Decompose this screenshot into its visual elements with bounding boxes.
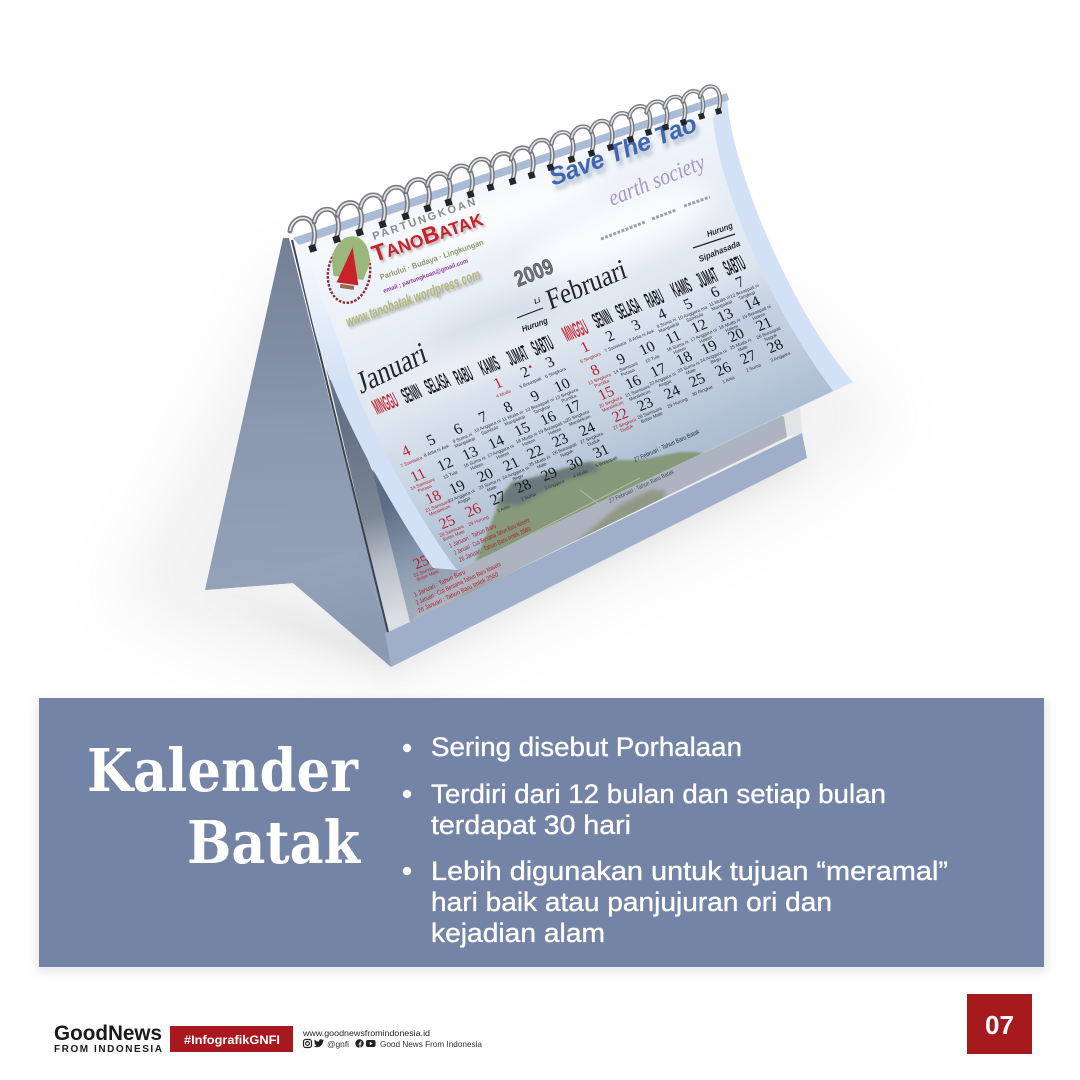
february weekday header xyxy=(559,251,750,347)
february day grid: 13 xyxy=(714,305,736,326)
february day grid: 9 Suma ni xyxy=(656,317,677,329)
january day grid: Bego xyxy=(512,473,524,482)
save the tao shadow: Save The Tao xyxy=(548,115,704,197)
january weekday header: SABTU xyxy=(528,331,558,361)
bullet list: Terdiri dari 12 bulan dan setiap bulan xyxy=(431,779,886,809)
february day grid: 26 Boraspati xyxy=(755,326,782,340)
february weekday header: RABU xyxy=(641,285,668,313)
january day grid: 25 xyxy=(436,512,458,533)
february day grid: 17 Anggara ni xyxy=(689,327,718,343)
february holiday note: 27 Februari : Tahun Baru Batak xyxy=(633,428,701,464)
january day grid: 18 Muda ni xyxy=(515,431,538,444)
january day grid: Holom xyxy=(521,438,536,447)
january day grid: 1 xyxy=(491,374,506,392)
february day grid: 30 Ringkar xyxy=(691,384,714,397)
january day grid: 7 xyxy=(476,408,491,426)
february day grid: Holom xyxy=(672,346,687,355)
february day grid: 25 Muda ni xyxy=(729,337,752,350)
january day grid xyxy=(392,351,618,542)
january day grid: 31 xyxy=(590,441,612,462)
january day grid: 10 xyxy=(551,375,573,396)
page number badge xyxy=(967,994,1032,1054)
january holiday notes: 2 Januari : Cuti Bersama Tahun Baru Masehi xyxy=(453,517,531,557)
hashtag badge: #InfografikGNFI xyxy=(184,1033,280,1047)
january day grid: 26 Boraspati xyxy=(551,442,578,456)
stand floor fold xyxy=(205,550,391,667)
february day grid: Angga xyxy=(657,378,672,388)
january day grid: 24 xyxy=(576,419,598,440)
january day grid: Mangadop xyxy=(504,414,526,427)
january holiday notes: 26 Januari : Tahun Baru Imlek 2560 xyxy=(458,526,532,564)
february day grid: 3 Anggara xyxy=(770,350,792,363)
sheet margin xyxy=(293,93,853,570)
january day grid: 9 xyxy=(528,387,543,405)
february day grid: 1 Artia xyxy=(721,375,736,384)
icon: instagram xyxy=(304,1040,312,1048)
bullet list: kejadian alam xyxy=(431,918,605,948)
february day grid: 18 xyxy=(673,348,695,369)
january day grid: 3 xyxy=(543,353,558,371)
january day grid: 22 Anggara ni xyxy=(447,488,476,504)
january weekday header: MINGGU xyxy=(369,389,402,420)
january day grid: Nagok xyxy=(559,448,575,458)
li label and rule: Hurung xyxy=(520,315,550,334)
february day grid: 16 Suma ni xyxy=(666,339,689,353)
li label and rule: Li xyxy=(533,297,543,306)
january day grid: 10 Anggara ni xyxy=(473,418,502,434)
bullet list xyxy=(403,732,948,948)
partungkoan label: PARTUNGKOAN xyxy=(371,196,477,243)
february day grid: 3 xyxy=(629,316,644,334)
february day grid: 20 xyxy=(725,325,747,346)
january day grid: 28 xyxy=(512,476,534,497)
january day grid: 9 Suma ni xyxy=(452,432,473,444)
photo island xyxy=(474,450,704,562)
january day grid: Sambulo xyxy=(480,425,500,436)
january day grid: 25 Muda ni xyxy=(528,454,551,467)
sheet photo xyxy=(303,117,833,570)
february day grid: 14 Samisara xyxy=(612,361,639,375)
panel: kalender batak xyxy=(36,698,1047,972)
stand dark fold line xyxy=(292,240,388,632)
hurung sipahasada: Sipahasada xyxy=(697,238,742,264)
february day grid: 25 xyxy=(686,370,708,391)
february day grid: 11 xyxy=(662,327,684,348)
february day grid: Sambulo xyxy=(685,312,705,323)
february day grid: 23 xyxy=(634,394,656,415)
february day grid: 21 xyxy=(753,314,775,335)
tanobatak logotype: TANOBATAK xyxy=(368,204,486,267)
lower sheet day 25: Bulan Mate xyxy=(416,569,440,582)
january day grid: 21 xyxy=(500,454,522,475)
january day grid: 22 xyxy=(524,442,546,463)
january day grid: 11 Muda ni xyxy=(501,409,524,422)
bullet list: Lebih digunakan untuk tujuan “meramal” xyxy=(431,856,948,886)
february weekday header: SENIN xyxy=(589,305,616,333)
icon: twitter xyxy=(314,1039,324,1047)
illustration: desk calendar xyxy=(205,86,853,667)
january day grid: 23 xyxy=(549,430,571,451)
february day grid: 6 xyxy=(708,283,723,301)
top calendar sheet xyxy=(290,93,853,590)
january day grid: 12 Boraspati ni xyxy=(524,397,555,413)
lower sheet red notes: 2 Januari : Cuti Bersama Tahun Baru Masehi xyxy=(415,561,502,607)
li label and rule xyxy=(517,297,550,334)
january day grid: Angga xyxy=(456,495,471,505)
february day grid: Purasa xyxy=(620,367,636,377)
february day grid: 27 Singkora xyxy=(612,417,637,431)
february day grid: 22 xyxy=(609,405,631,426)
back paper strip xyxy=(296,240,410,632)
february day grid: 4 xyxy=(655,305,670,323)
stand base front xyxy=(385,433,807,667)
january day grid: 12 xyxy=(434,454,456,475)
january day grid: 27 xyxy=(487,488,509,509)
february day grid: Mangadop xyxy=(711,299,733,312)
february day grid: 23 Suma ni xyxy=(677,360,700,374)
january weekday header: RABU xyxy=(450,362,477,390)
heading: Kalender xyxy=(87,736,359,805)
february day grid: 14 xyxy=(741,293,763,314)
january day grid: 4 Muda xyxy=(495,388,512,399)
february weekday header: KAMIS xyxy=(667,273,696,303)
january day grid: 19 Boraspati ni xyxy=(537,419,568,435)
bullet list: hari baik atau panjujuran ori dan xyxy=(431,887,832,917)
february day grid: Mandokum xyxy=(628,389,652,402)
february day grid: Nagok xyxy=(763,332,779,342)
january day grid: 2 Suma xyxy=(520,491,537,502)
january day grid: 29 xyxy=(538,464,560,485)
january day grid: 6 xyxy=(451,420,466,438)
february weekday header: MINGGU xyxy=(559,316,592,347)
february day grid: 9 xyxy=(614,350,629,368)
website url: www.goodnewsfromindonesia.id xyxy=(302,1028,430,1038)
january day grid: Holom xyxy=(547,427,562,436)
january day grid: 20 Singkora xyxy=(565,409,590,423)
january day grid: 1 Artia xyxy=(496,504,511,513)
lower sheet island xyxy=(452,488,667,601)
february day grid: 29 Hurung xyxy=(666,396,689,409)
february day grid: 11 Muda ni xyxy=(708,294,731,307)
january day grid: 6 Singkora xyxy=(544,366,567,379)
hashtag badge xyxy=(170,1026,293,1052)
february day grid: 26 xyxy=(712,359,734,380)
january day grid: 14 xyxy=(485,432,507,453)
january day grid: 3 Anggara xyxy=(544,478,566,491)
january day grid: 14 Samisara xyxy=(409,477,436,491)
february day grid: Duduk xyxy=(619,423,635,433)
january day grid: Holom xyxy=(469,462,484,471)
lower sheet margin xyxy=(783,404,802,437)
february day grid: 13 Singkora xyxy=(587,372,612,386)
february day grid: 27 xyxy=(737,347,759,368)
february day grid: Holom xyxy=(698,335,713,344)
february day grid: Mate xyxy=(737,344,749,353)
january day grid: 8 Artia ni Aek xyxy=(423,443,451,458)
february day grid: 24 xyxy=(661,382,683,403)
february day grid: 2 Suma xyxy=(745,362,762,373)
spiral binding rings xyxy=(290,86,722,253)
calendar stand left face xyxy=(205,238,391,667)
january day grid: 2 xyxy=(518,363,533,381)
february day grid: 19 Boraspati ni xyxy=(741,304,772,320)
lower sheet day 25 xyxy=(405,550,441,582)
february day grid: Bego xyxy=(710,356,722,365)
january day grid: 16 Suma ni xyxy=(463,455,486,469)
february day grid: 6 Singkora xyxy=(579,351,602,364)
february day grid: 12 Boraspati ni xyxy=(729,283,760,299)
brand text xyxy=(344,196,488,333)
january weekday header: SELASA xyxy=(421,369,454,399)
january day grid: 21 Samisara xyxy=(424,499,451,513)
february day grid: 2 xyxy=(603,327,618,345)
january day grid: Purasa xyxy=(417,483,433,493)
icon: youtube xyxy=(366,1040,376,1047)
lower sheet xyxy=(372,408,802,622)
bullet list: terdapat 30 hari xyxy=(431,810,631,840)
january day grid: 4 xyxy=(399,442,414,460)
january day grid: 5 Boraspati xyxy=(519,376,542,389)
february day grid: 21 Samisara xyxy=(624,384,651,398)
january day grid: 30 xyxy=(564,453,586,474)
batak script line xyxy=(601,197,710,239)
2009 year: 2009 xyxy=(511,253,557,292)
logo badge xyxy=(324,233,375,306)
january day grid: 26 xyxy=(462,500,484,521)
january day grid: Mate xyxy=(486,484,498,493)
february day grid: Mate xyxy=(685,367,697,376)
bullet list: Sering disebut Porhalaan xyxy=(431,732,742,762)
february weekday header: JUMAT xyxy=(693,263,722,293)
february day grid: 8 xyxy=(588,361,603,379)
february day grid: Bulan Mate xyxy=(640,411,664,424)
january weekday header xyxy=(369,331,558,420)
january day grid: Bulan Mate xyxy=(442,529,466,542)
january day grid: 19 xyxy=(446,477,468,498)
january day grid: 17 xyxy=(562,397,584,418)
february day grid: Purnika xyxy=(593,378,610,389)
january day grid: 28 Samisara xyxy=(438,524,465,538)
january day grid: Mangadop xyxy=(454,436,476,449)
january day grid: 17 Anggara ni xyxy=(486,443,515,459)
februari title: Februari xyxy=(542,253,630,317)
icon: facebook xyxy=(355,1039,364,1048)
february day grid: 28 xyxy=(764,336,786,357)
february day grid: 8 Artia ni Aek xyxy=(628,328,656,343)
tanobatak shadow: TANOBATAK xyxy=(370,206,488,269)
hurung sipahasada xyxy=(693,220,742,264)
january day grid: 5 xyxy=(424,431,439,449)
february day grid: 7 xyxy=(733,273,748,291)
from indonesia: FROM INDONESIA xyxy=(54,1044,162,1055)
february day grid: 12 xyxy=(688,316,710,337)
website shadow: www.tanobatak.wordpress.com xyxy=(346,268,485,333)
february day grid: 1 xyxy=(578,338,593,356)
email: email ; partungkoan@gmail.com xyxy=(382,257,470,295)
february day grid: 19 xyxy=(698,337,720,358)
february day grid: 10 xyxy=(636,338,658,359)
january weekday header: KAMIS xyxy=(475,351,504,381)
february day grid: 15 xyxy=(595,383,617,404)
january day grid: 13 Singkora xyxy=(554,387,579,401)
january holiday notes: 1 Januari : Tahun Baru xyxy=(448,523,498,550)
january day grid: Mate xyxy=(536,461,548,470)
february day grid: Mangadop xyxy=(658,321,680,334)
lower sheet red notes: 1 Januari : Tahun Baru xyxy=(413,569,467,599)
february day grid: 10 Anggara ma xyxy=(677,305,708,321)
february weekday header: SABTU xyxy=(720,251,750,281)
february weekday header: SELASA xyxy=(612,294,645,324)
february day grid: 17 xyxy=(647,360,669,381)
lower sheet feb note: 27 Februari : Tahun Baru Batak xyxy=(608,469,676,505)
february day grid: 15 Tula xyxy=(644,353,661,364)
january day grid: 8 xyxy=(501,398,516,416)
januari title: Januari xyxy=(353,334,431,401)
february day grid: 5 xyxy=(681,295,696,313)
february day grid: 28 Samisara xyxy=(636,406,663,420)
tagline: Parlului · Budaya · Lingkungan xyxy=(379,238,485,282)
lower sheet day 25: 25 xyxy=(410,552,432,573)
january day grid: 20 xyxy=(474,465,496,486)
february day grid: 7 Samisara xyxy=(604,340,628,353)
february day grid: 16 xyxy=(622,372,644,393)
handle: @gnfi xyxy=(327,1039,349,1049)
february day grid: Holom xyxy=(751,312,766,321)
heading xyxy=(87,736,361,877)
january day grid: 15 xyxy=(511,419,533,440)
band under spiral xyxy=(293,93,729,245)
heading: Batak xyxy=(187,808,361,877)
february day grid: Holom xyxy=(724,324,739,333)
january day grid: 5 Boraspati xyxy=(595,455,618,468)
save the tao: Save The Tao xyxy=(545,110,701,192)
february day grid: 22 Anggara ni xyxy=(648,371,677,387)
january day grid: 7 Samisara xyxy=(400,455,424,468)
january day grid: 13 xyxy=(459,443,481,464)
january weekday header: JUMAT xyxy=(503,341,532,371)
january day grid: 23 Suma ni xyxy=(478,477,501,491)
lower sheet red notes: 26 Januari : Tahun Baru Imlek 2560 xyxy=(417,571,500,615)
january day grid: Tangkup xyxy=(533,404,551,415)
january day grid: 24 Anggara ni xyxy=(501,465,530,481)
earth society: earth society xyxy=(605,149,709,211)
february day grid xyxy=(571,269,792,435)
january day grid: 29 Hurung xyxy=(467,514,490,527)
lower sheet day 25: 22 Samisara xyxy=(412,564,439,578)
january day grid: 4 Muda xyxy=(572,468,589,479)
february day grid: 18 Muda ni xyxy=(718,317,741,330)
january day grid: Purnika xyxy=(560,393,577,404)
february day grid: 20 Singkora xyxy=(598,395,623,409)
january day grid: 18 xyxy=(422,487,444,508)
january day grid: 11 xyxy=(407,465,429,486)
january day grid: 16 xyxy=(537,408,559,429)
february day grid: Tangkup xyxy=(738,290,756,301)
channel name: Good News From Indonesia xyxy=(380,1039,482,1049)
website: www.tanobatak.wordpress.com xyxy=(344,266,483,331)
hurung sipahasada: Hurung xyxy=(705,220,735,239)
january day grid: 27 Singkora xyxy=(579,431,604,445)
january day grid: 15 Tula xyxy=(442,469,459,480)
footer brand xyxy=(54,1021,482,1055)
february day grid: Mandokum xyxy=(601,400,625,413)
january day grid: Mandokum xyxy=(428,504,452,517)
january day grid: Duduk xyxy=(586,437,602,447)
january day grid: Mandokum xyxy=(568,414,592,427)
january weekday header: SENIN xyxy=(398,380,425,408)
goodnews logotype: GoodNews xyxy=(54,1021,162,1045)
february day grid: 24 Anggara ni xyxy=(699,348,728,364)
january day grid: Holom xyxy=(495,451,510,460)
page number badge: 07 xyxy=(985,1010,1014,1040)
calendar soft shadow xyxy=(110,260,900,690)
